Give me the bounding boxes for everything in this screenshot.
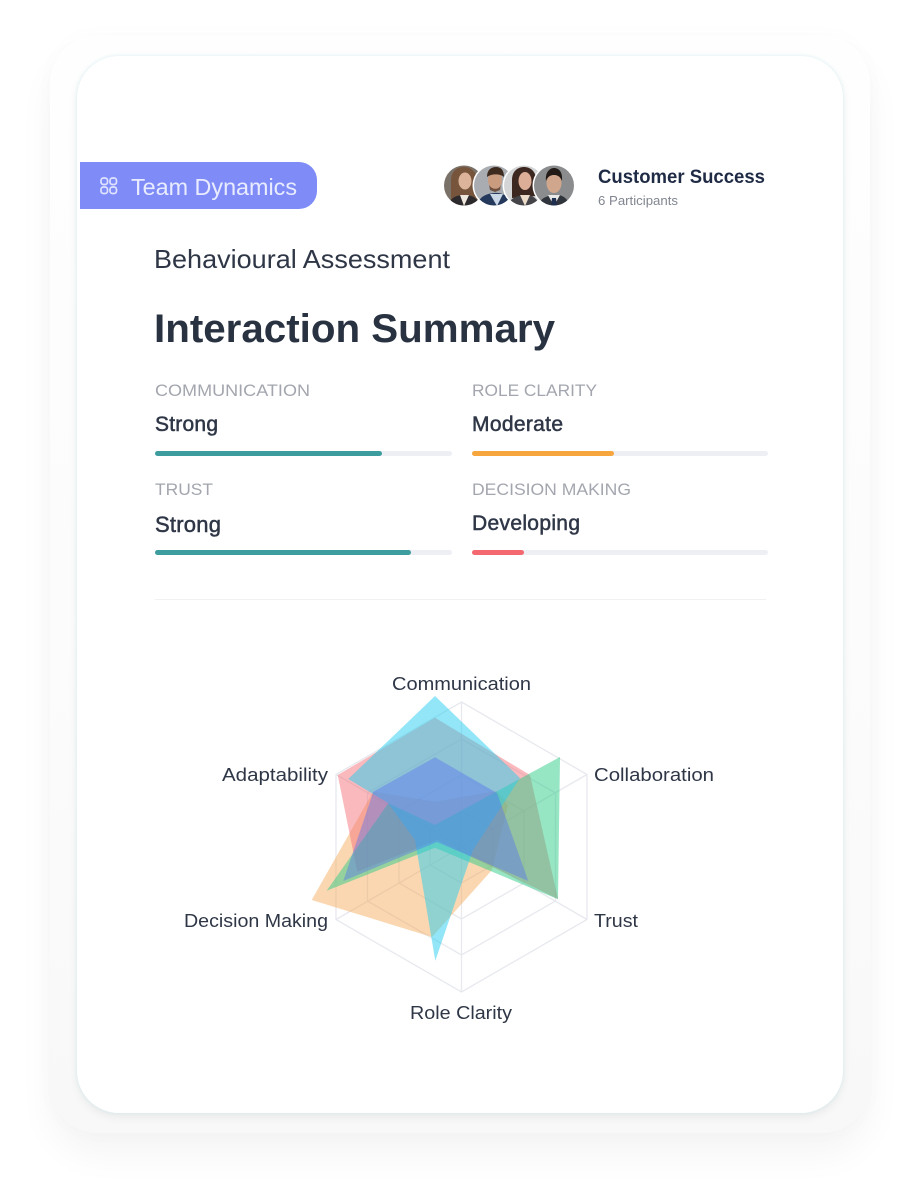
- metric: decision making: [472, 480, 768, 555]
- metric: communication: Strong: [155, 413, 218, 436]
- team name: Customer Success: [598, 167, 765, 188]
- metric: trust: Strong: [155, 512, 221, 537]
- axis label: Decision Making: Decision Making: [184, 911, 328, 931]
- avatar: man 2: [474, 166, 508, 206]
- metric: role clarity: ROLE CLARITY: [472, 381, 597, 400]
- axis label: Adaptability: Adaptability: [222, 765, 328, 785]
- avatar: woman 3: [504, 166, 538, 206]
- metric: trust: [155, 480, 452, 555]
- infographic content: [80, 162, 768, 1023]
- axis label: Collaboration: Collaboration: [594, 765, 714, 785]
- series: blue: [343, 757, 528, 881]
- metric: role clarity: Moderate: [472, 413, 563, 436]
- participants count: 6 Participants: [598, 193, 679, 208]
- series: green: [327, 757, 560, 899]
- title: Interaction Summary: [154, 307, 556, 351]
- avatar: woman 1: [444, 166, 478, 206]
- avatars: [444, 164, 576, 207]
- tag label: Team Dynamics: [131, 174, 297, 200]
- metric: role clarity: [472, 381, 768, 456]
- metric: communication: COMMUNICATION: [155, 381, 310, 400]
- avatar: man 4: [534, 165, 574, 206]
- subtitle: Behavioural Assessment: [154, 244, 451, 274]
- series: pink: [338, 718, 558, 899]
- series: cyan: [348, 696, 520, 961]
- axis label: Trust: Trust: [594, 911, 638, 931]
- radar chart: [184, 674, 714, 1023]
- axis label: Role Clarity: Role Clarity: [410, 1003, 512, 1023]
- metric: trust: TRUST: [155, 480, 213, 499]
- metric: decision making: Developing: [472, 512, 580, 535]
- tag: Team Dynamics: [80, 162, 317, 209]
- metric: communication: [155, 381, 452, 456]
- axis label: Communication: Communication: [392, 674, 531, 694]
- panel: inner card: [77, 56, 843, 1113]
- series: orange: [312, 791, 508, 937]
- metric: decision making: DECISION MAKING: [472, 480, 631, 499]
- icon: grid: [101, 178, 116, 194]
